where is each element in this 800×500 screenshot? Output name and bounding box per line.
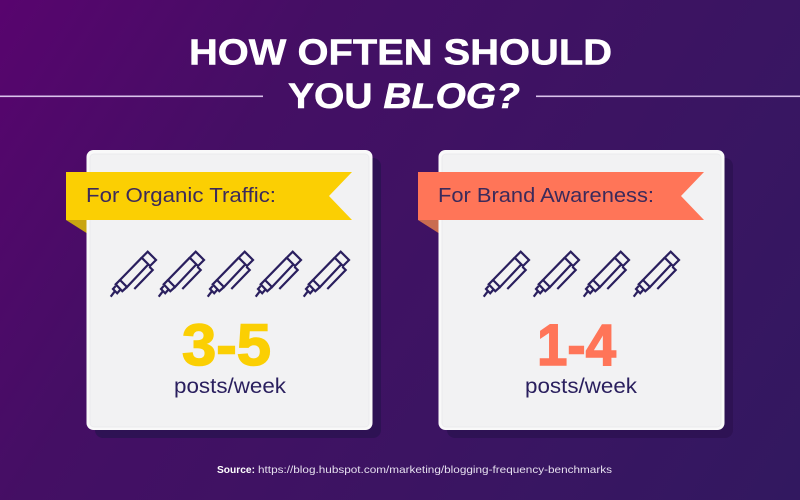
ribbon: yellow bbox=[66, 172, 352, 220]
title: HOW OFTEN SHOULD bbox=[189, 32, 612, 72]
ribbon: coral bbox=[418, 172, 704, 220]
source: https://blog.hubspot.com/marketing/blogging-frequency-benchmarks bbox=[258, 464, 612, 476]
ribbon label: For Organic Traffic: bbox=[86, 185, 276, 207]
ribbon fold bbox=[66, 220, 86, 233]
panel: organic traffic bbox=[66, 150, 381, 438]
card shadow bbox=[95, 158, 381, 438]
ribbon label: For Brand Awareness: bbox=[438, 185, 654, 207]
stat label: posts/week bbox=[525, 374, 637, 398]
title bbox=[189, 32, 612, 116]
icons: five pens bbox=[111, 252, 349, 297]
card shadow bbox=[447, 158, 733, 438]
stat: 3-5: 3-5 bbox=[182, 313, 271, 378]
stat label: posts/week bbox=[174, 374, 286, 398]
source: Source: bbox=[217, 464, 255, 476]
card bbox=[438, 150, 724, 430]
card bbox=[86, 150, 372, 430]
title: YOU BLOG? bbox=[288, 77, 520, 116]
ribbon fold bbox=[418, 220, 438, 233]
stat: 1-4: 1-4 bbox=[537, 313, 616, 378]
icons: four pens bbox=[484, 252, 679, 297]
panel: brand awareness bbox=[418, 150, 733, 438]
